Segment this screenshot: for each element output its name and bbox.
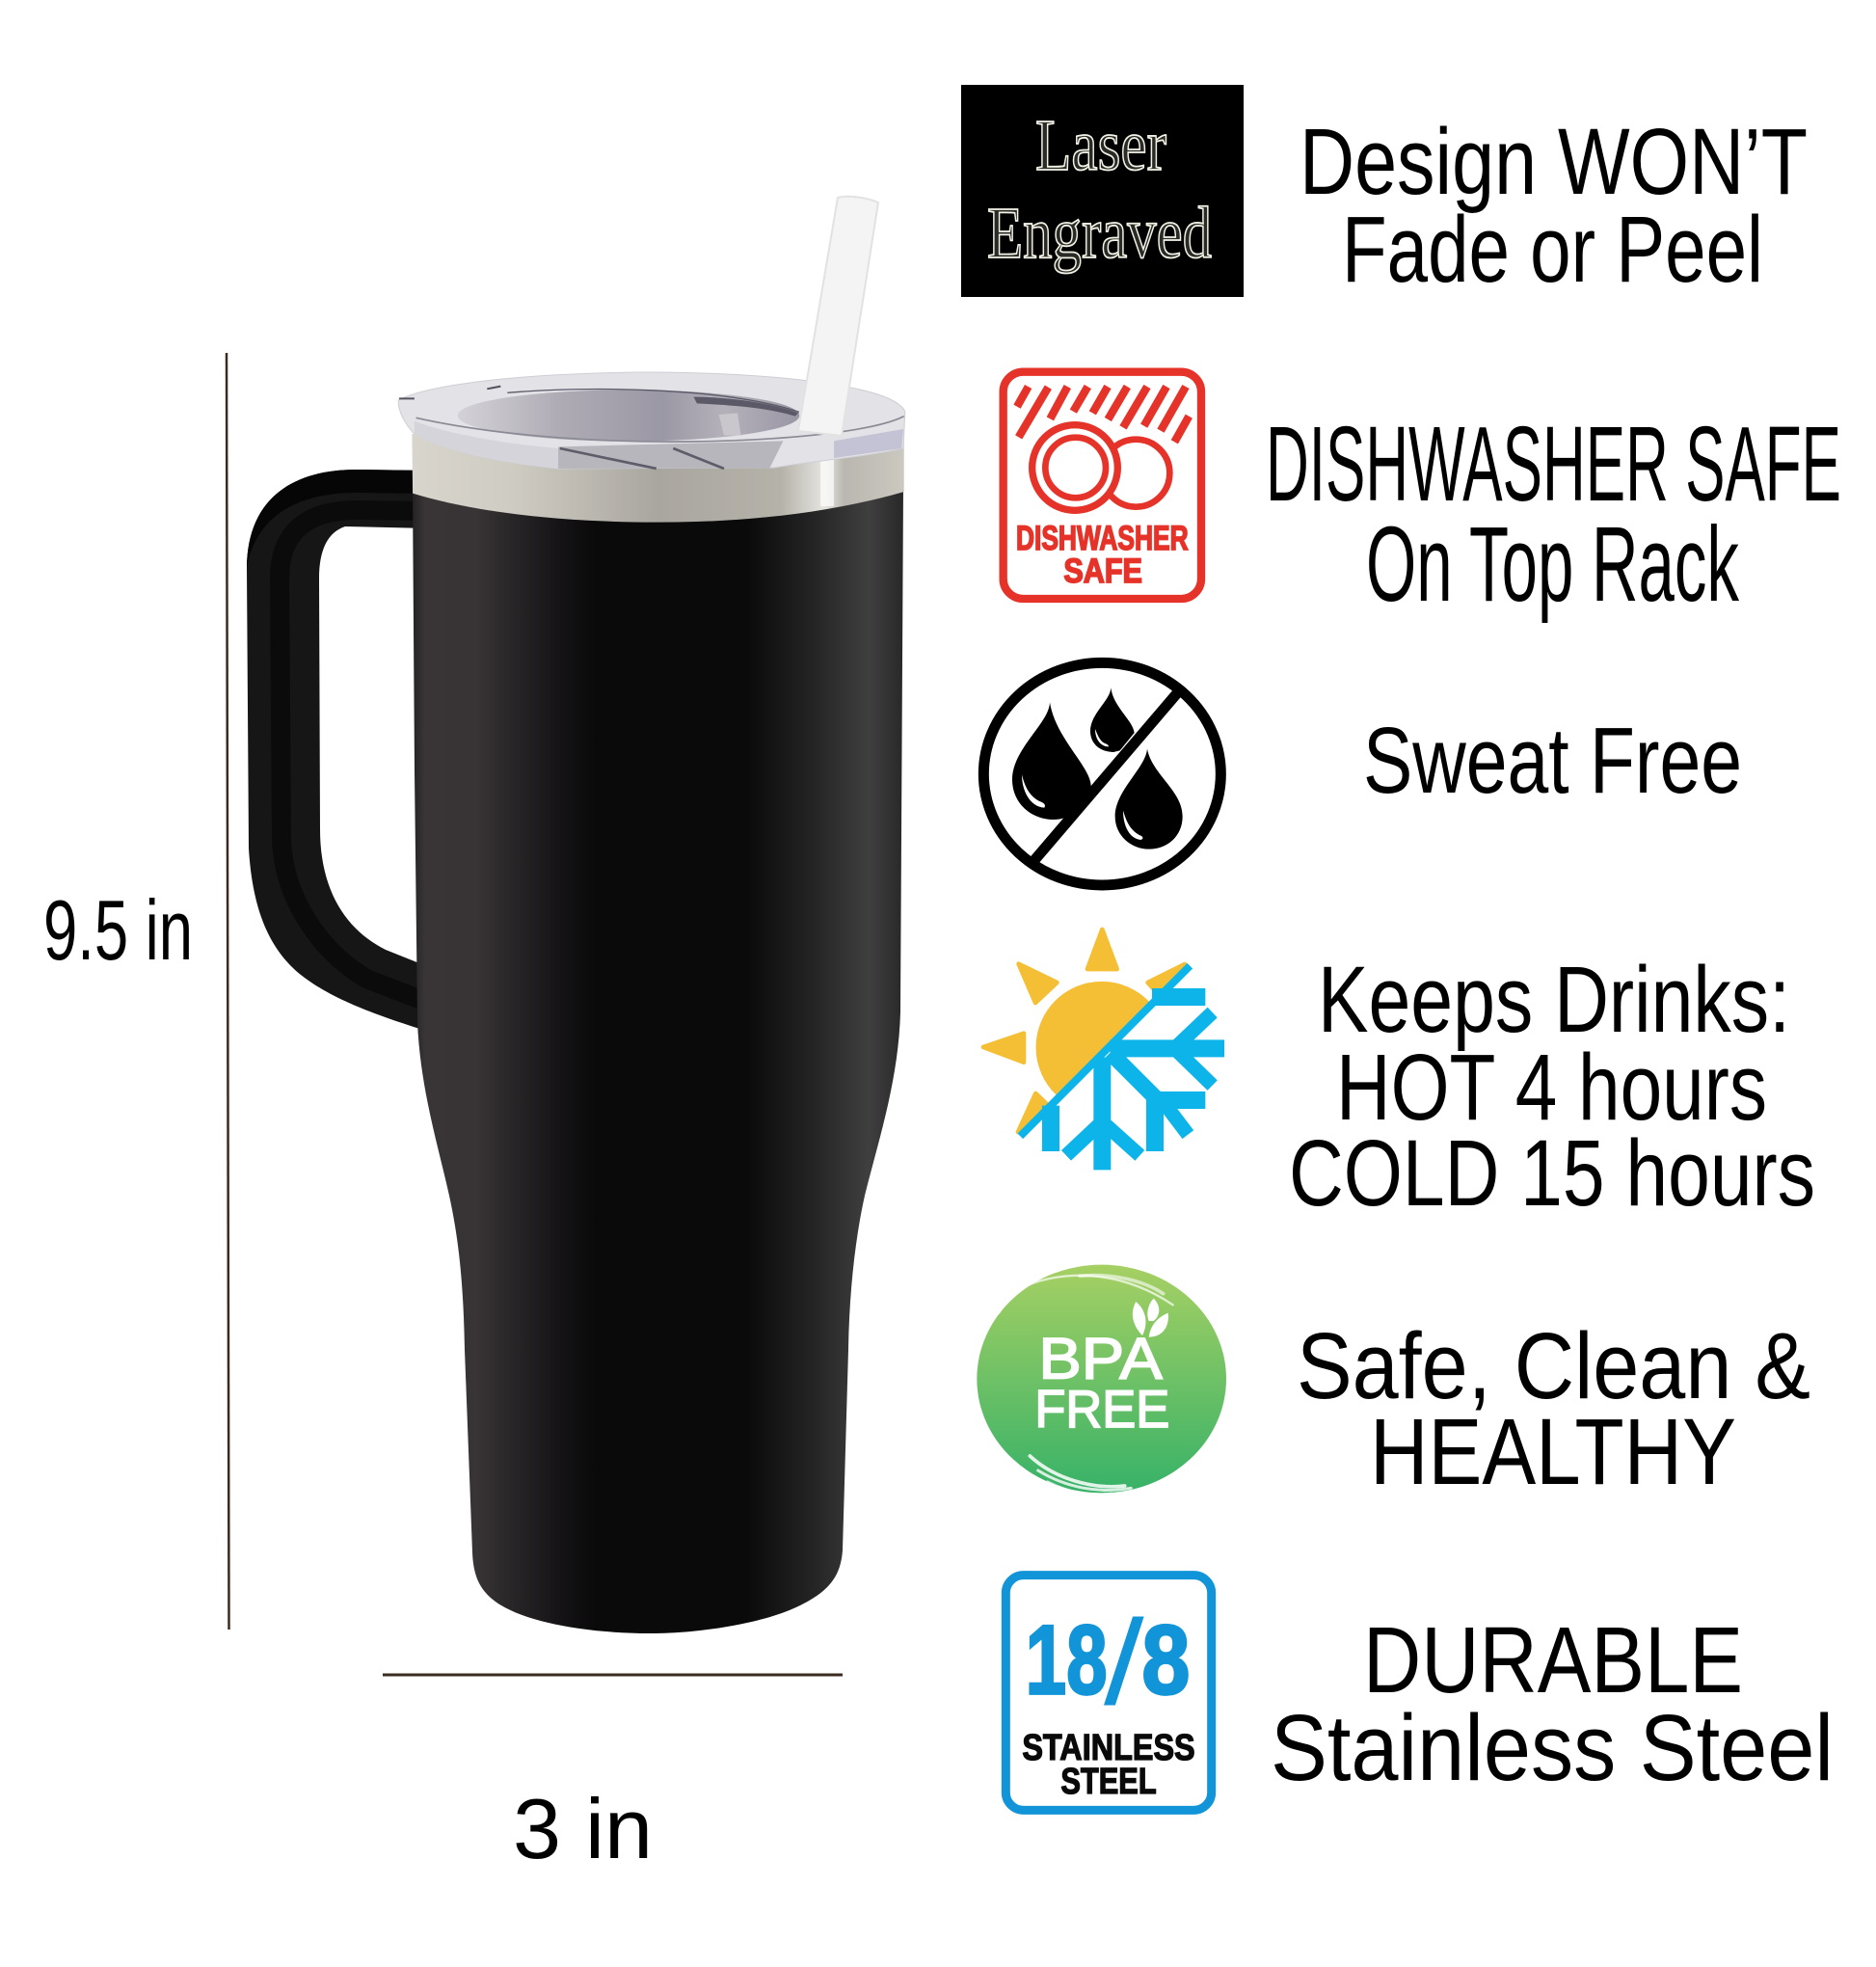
icon: 18/8 stainless steel: 8 — [1141, 1605, 1190, 1715]
dimension label: 3 in: 3 in — [513, 1781, 653, 1876]
feature text: design won't fade — [1300, 109, 1808, 302]
icon: 18/8 stainless steel — [1005, 1576, 1212, 1810]
icon: 18/8 stainless steel: / — [1104, 1595, 1144, 1730]
feature text: safe clean healthy: HEALTHY — [1370, 1399, 1736, 1504]
BPA FREE lettering: FREE — [1034, 1379, 1169, 1439]
badge text: Engraved: Engraved — [987, 193, 1212, 274]
BPA FREE lettering — [1034, 1299, 1169, 1439]
feature text: safe clean healthy: Safe, Clean & — [1297, 1313, 1810, 1418]
feature text: durable stainless steel: DURABLE — [1363, 1607, 1743, 1712]
feature text: keeps drinks hot and cold — [1289, 947, 1815, 1226]
feature text: durable stainless steel: Stainless Steel — [1271, 1695, 1834, 1800]
BPA FREE lettering: BPA — [1038, 1326, 1163, 1390]
drinking straw — [798, 197, 878, 436]
badge text: Laser: Laser — [1035, 105, 1166, 186]
tumbler illustration — [247, 197, 905, 1633]
icon: dishwasher safe — [1004, 372, 1201, 599]
dimension line: width — [383, 1674, 843, 1676]
feature text: dishwasher safe — [1266, 405, 1841, 624]
tumbler lid and steel rim — [398, 372, 905, 523]
feature: laser engraved badge — [961, 85, 1244, 297]
icon: BPA free — [977, 1265, 1226, 1495]
dimension label: 9.5 in: 9.5 in — [43, 882, 193, 978]
icon: hot and cold — [983, 930, 1224, 1170]
feature text: design won't fade: Fade or Peel — [1342, 197, 1763, 302]
feature text: sweat free: Sweat Free — [1363, 708, 1742, 813]
dimension line: height — [227, 353, 229, 1630]
tumbler handle — [247, 470, 429, 1032]
feature text: durable stainless steel — [1271, 1607, 1834, 1800]
icon: sweat free — [983, 662, 1220, 885]
feature text: safe clean healthy — [1297, 1313, 1810, 1504]
icon: dishwasher safe: SAFE — [1063, 552, 1142, 590]
tumbler body — [413, 487, 903, 1633]
icon: 18/8 stainless steel: 18 — [1026, 1605, 1108, 1715]
icon: 18/8 stainless steel: STEEL — [1060, 1762, 1157, 1802]
icon: 18/8 stainless steel: STAINLESS — [1022, 1728, 1195, 1768]
feature text: keeps drinks hot and cold: HOT 4 hours — [1336, 1035, 1767, 1140]
icon: dishwasher safe: DISHWASHER — [1016, 520, 1189, 557]
